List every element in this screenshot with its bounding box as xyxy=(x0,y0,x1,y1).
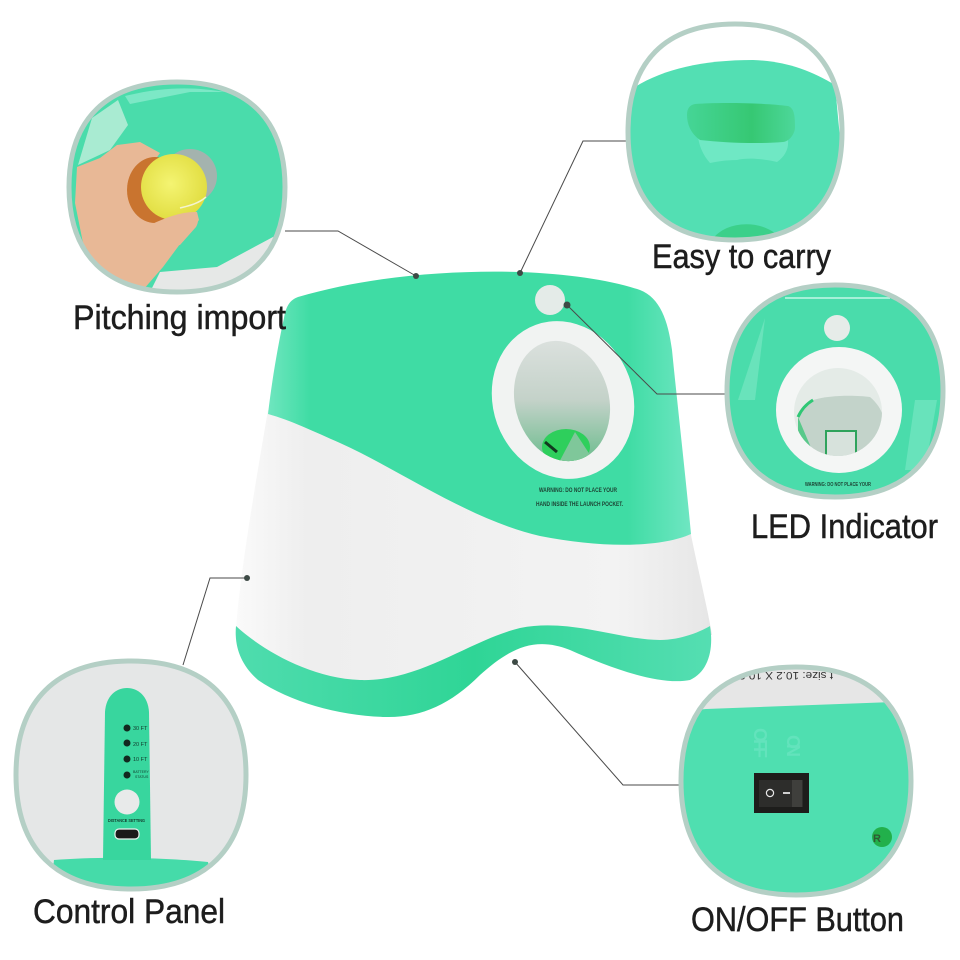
panel: on/off button xyxy=(675,660,920,900)
embossed OFF / ON: ON xyxy=(783,735,803,757)
pocket ring xyxy=(776,347,902,473)
launcher green base band xyxy=(236,625,711,717)
LED labels: STATUS xyxy=(135,775,149,779)
embossed OFF / ON: OFF xyxy=(750,728,770,758)
tennis ball xyxy=(141,154,207,220)
handle lip xyxy=(698,139,788,163)
hand xyxy=(75,142,199,290)
distance button xyxy=(114,790,140,814)
label: pitching import: Pitching import xyxy=(73,299,287,337)
distance setting label: DISTANCE SETTING xyxy=(108,818,145,823)
indicator LEDs xyxy=(124,724,130,778)
panel: pitching import xyxy=(66,80,288,294)
warning text xyxy=(536,488,623,508)
label: on/off button: ON/OFF Button xyxy=(691,901,904,939)
green control strip xyxy=(103,688,151,860)
screw hole xyxy=(872,827,892,847)
palm shadow xyxy=(127,157,165,223)
panel: on/off button: R xyxy=(873,833,881,845)
label: LED indicator: LED Indicator xyxy=(751,508,938,546)
LED labels: BATTERY xyxy=(133,770,149,774)
main product: ball launcher xyxy=(236,272,712,717)
pocket interior xyxy=(794,368,882,456)
leader lines xyxy=(183,141,727,785)
launch pocket opening xyxy=(514,341,610,462)
launcher white body xyxy=(236,410,712,690)
panel: LED indicator xyxy=(720,280,950,505)
USB port xyxy=(115,829,139,839)
warning text: HAND INSIDE THE LAUNCH POCKET. xyxy=(536,502,623,508)
panel: control panel xyxy=(10,655,255,895)
upside-down size text: t size: 10.2 X 10.2 xyxy=(739,669,833,681)
thumb xyxy=(154,212,198,246)
LED labels: 10 FT xyxy=(133,757,148,763)
warning text: WARNING: DO NOT PLACE YOUR xyxy=(539,488,618,494)
launcher green top shell xyxy=(268,272,691,545)
base green xyxy=(54,858,208,886)
rocker switch xyxy=(754,773,809,813)
LED labels: 20 FT xyxy=(133,742,148,748)
label: easy to carry: Easy to carry xyxy=(652,238,831,276)
LED sensor dome xyxy=(535,285,565,315)
LED labels: 30 FT xyxy=(133,726,148,732)
label: control panel: Control Panel xyxy=(33,893,225,931)
launch pocket ring xyxy=(470,301,656,499)
bottom notch xyxy=(715,224,774,238)
embossed OFF / ON xyxy=(754,728,800,758)
LED labels xyxy=(133,726,149,779)
LED dome xyxy=(824,315,850,341)
white back strip xyxy=(702,670,884,710)
panel: easy to carry xyxy=(620,20,850,245)
warning fragment: WARNING: DO NOT PLACE YOUR xyxy=(805,482,871,488)
ball socket xyxy=(174,149,217,198)
handle recess xyxy=(687,103,795,143)
